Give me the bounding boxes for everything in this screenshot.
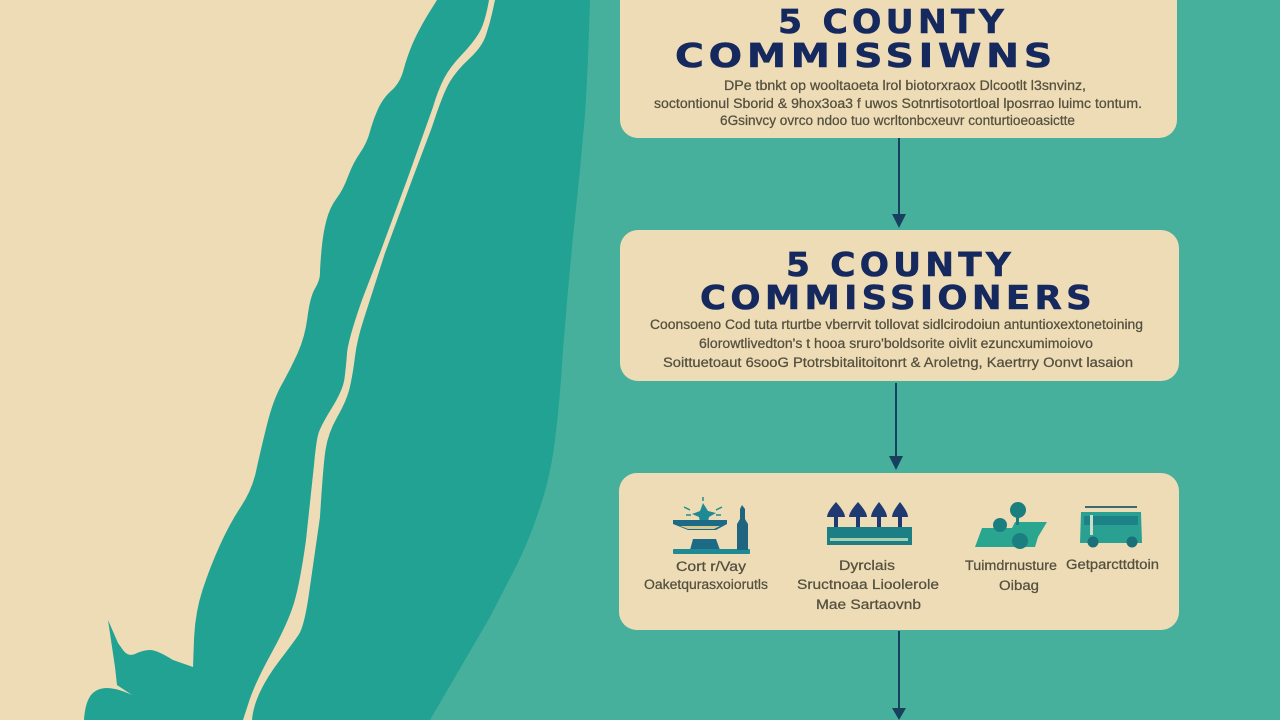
arrow: third card to next	[892, 631, 906, 720]
heading: 5 county commissioners: 5 COUNTY	[778, 2, 1008, 41]
body text: 6lorowtlivedton's t hooa sruro'boldsorite oivlit ezuncxumimoiovo	[699, 336, 1093, 351]
map: teal county shape	[84, 0, 590, 720]
heading: 5 county commissioners: COMMISSIONERS	[700, 278, 1096, 317]
body text: Soittuetoaut 6sooG Ptotrsbitalitoitonrt & Aroletng, Kaertrry Oonvt lasaion	[663, 355, 1133, 370]
icon: park and monument	[673, 497, 750, 554]
icon labels	[644, 557, 1159, 612]
icon: van	[1080, 507, 1142, 548]
panel: second commissioners card	[620, 230, 1179, 381]
icon labels: Sructnoaa Lioolerole	[797, 577, 939, 592]
card background	[620, 0, 1177, 138]
body text	[654, 78, 1142, 128]
body text: Coonsoeno Cod tuta rturtbe vberrvit tollovat sidlcirodoiun antuntioxextonetoining	[650, 317, 1143, 332]
icon labels: Getparcttdtoin	[1066, 557, 1159, 572]
icon: trees on block	[827, 502, 912, 545]
arrow: first to second card	[892, 138, 906, 228]
icon labels: Tuimdrnusture	[965, 558, 1057, 573]
heading: 5 county commissioners	[700, 245, 1096, 317]
heading: 5 county commissioners: COMMISSIWNS	[675, 36, 1057, 75]
heading: 5 county commissioners: 5 COUNTY	[786, 245, 1015, 284]
card background	[620, 230, 1179, 381]
panel: first commissioners card	[620, 0, 1177, 138]
body text	[650, 317, 1143, 370]
icon labels: Dyrclais	[839, 558, 895, 573]
heading: 5 county commissioners	[675, 2, 1057, 75]
icon: landscape with trees	[975, 502, 1047, 549]
arrow: second to third card	[889, 383, 903, 470]
panel: icons card	[619, 473, 1179, 630]
map: river line	[243, 0, 495, 720]
icon labels: Mae Sartaovnb	[816, 597, 921, 612]
icon labels: Oibag	[999, 578, 1039, 593]
body text: 6Gsinvcy ovrco ndoo tuo wcrltonbcxeuvr conturtioeoasictte	[720, 113, 1075, 128]
body text: soctontionul Sborid & 9hox3oa3 f uwos Sotnrtisotortloal lposrrao luimc tontum.	[654, 96, 1142, 111]
card background	[619, 473, 1179, 630]
icon labels: Cort r/Vay	[676, 559, 746, 574]
body text: DPe tbnkt op wooltaoeta lrol biotorxraox Dlcootlt l3snvinz,	[724, 78, 1086, 93]
icon labels: Oaketqurasxoiorutls	[644, 577, 768, 592]
map panel: cream land	[0, 0, 460, 720]
